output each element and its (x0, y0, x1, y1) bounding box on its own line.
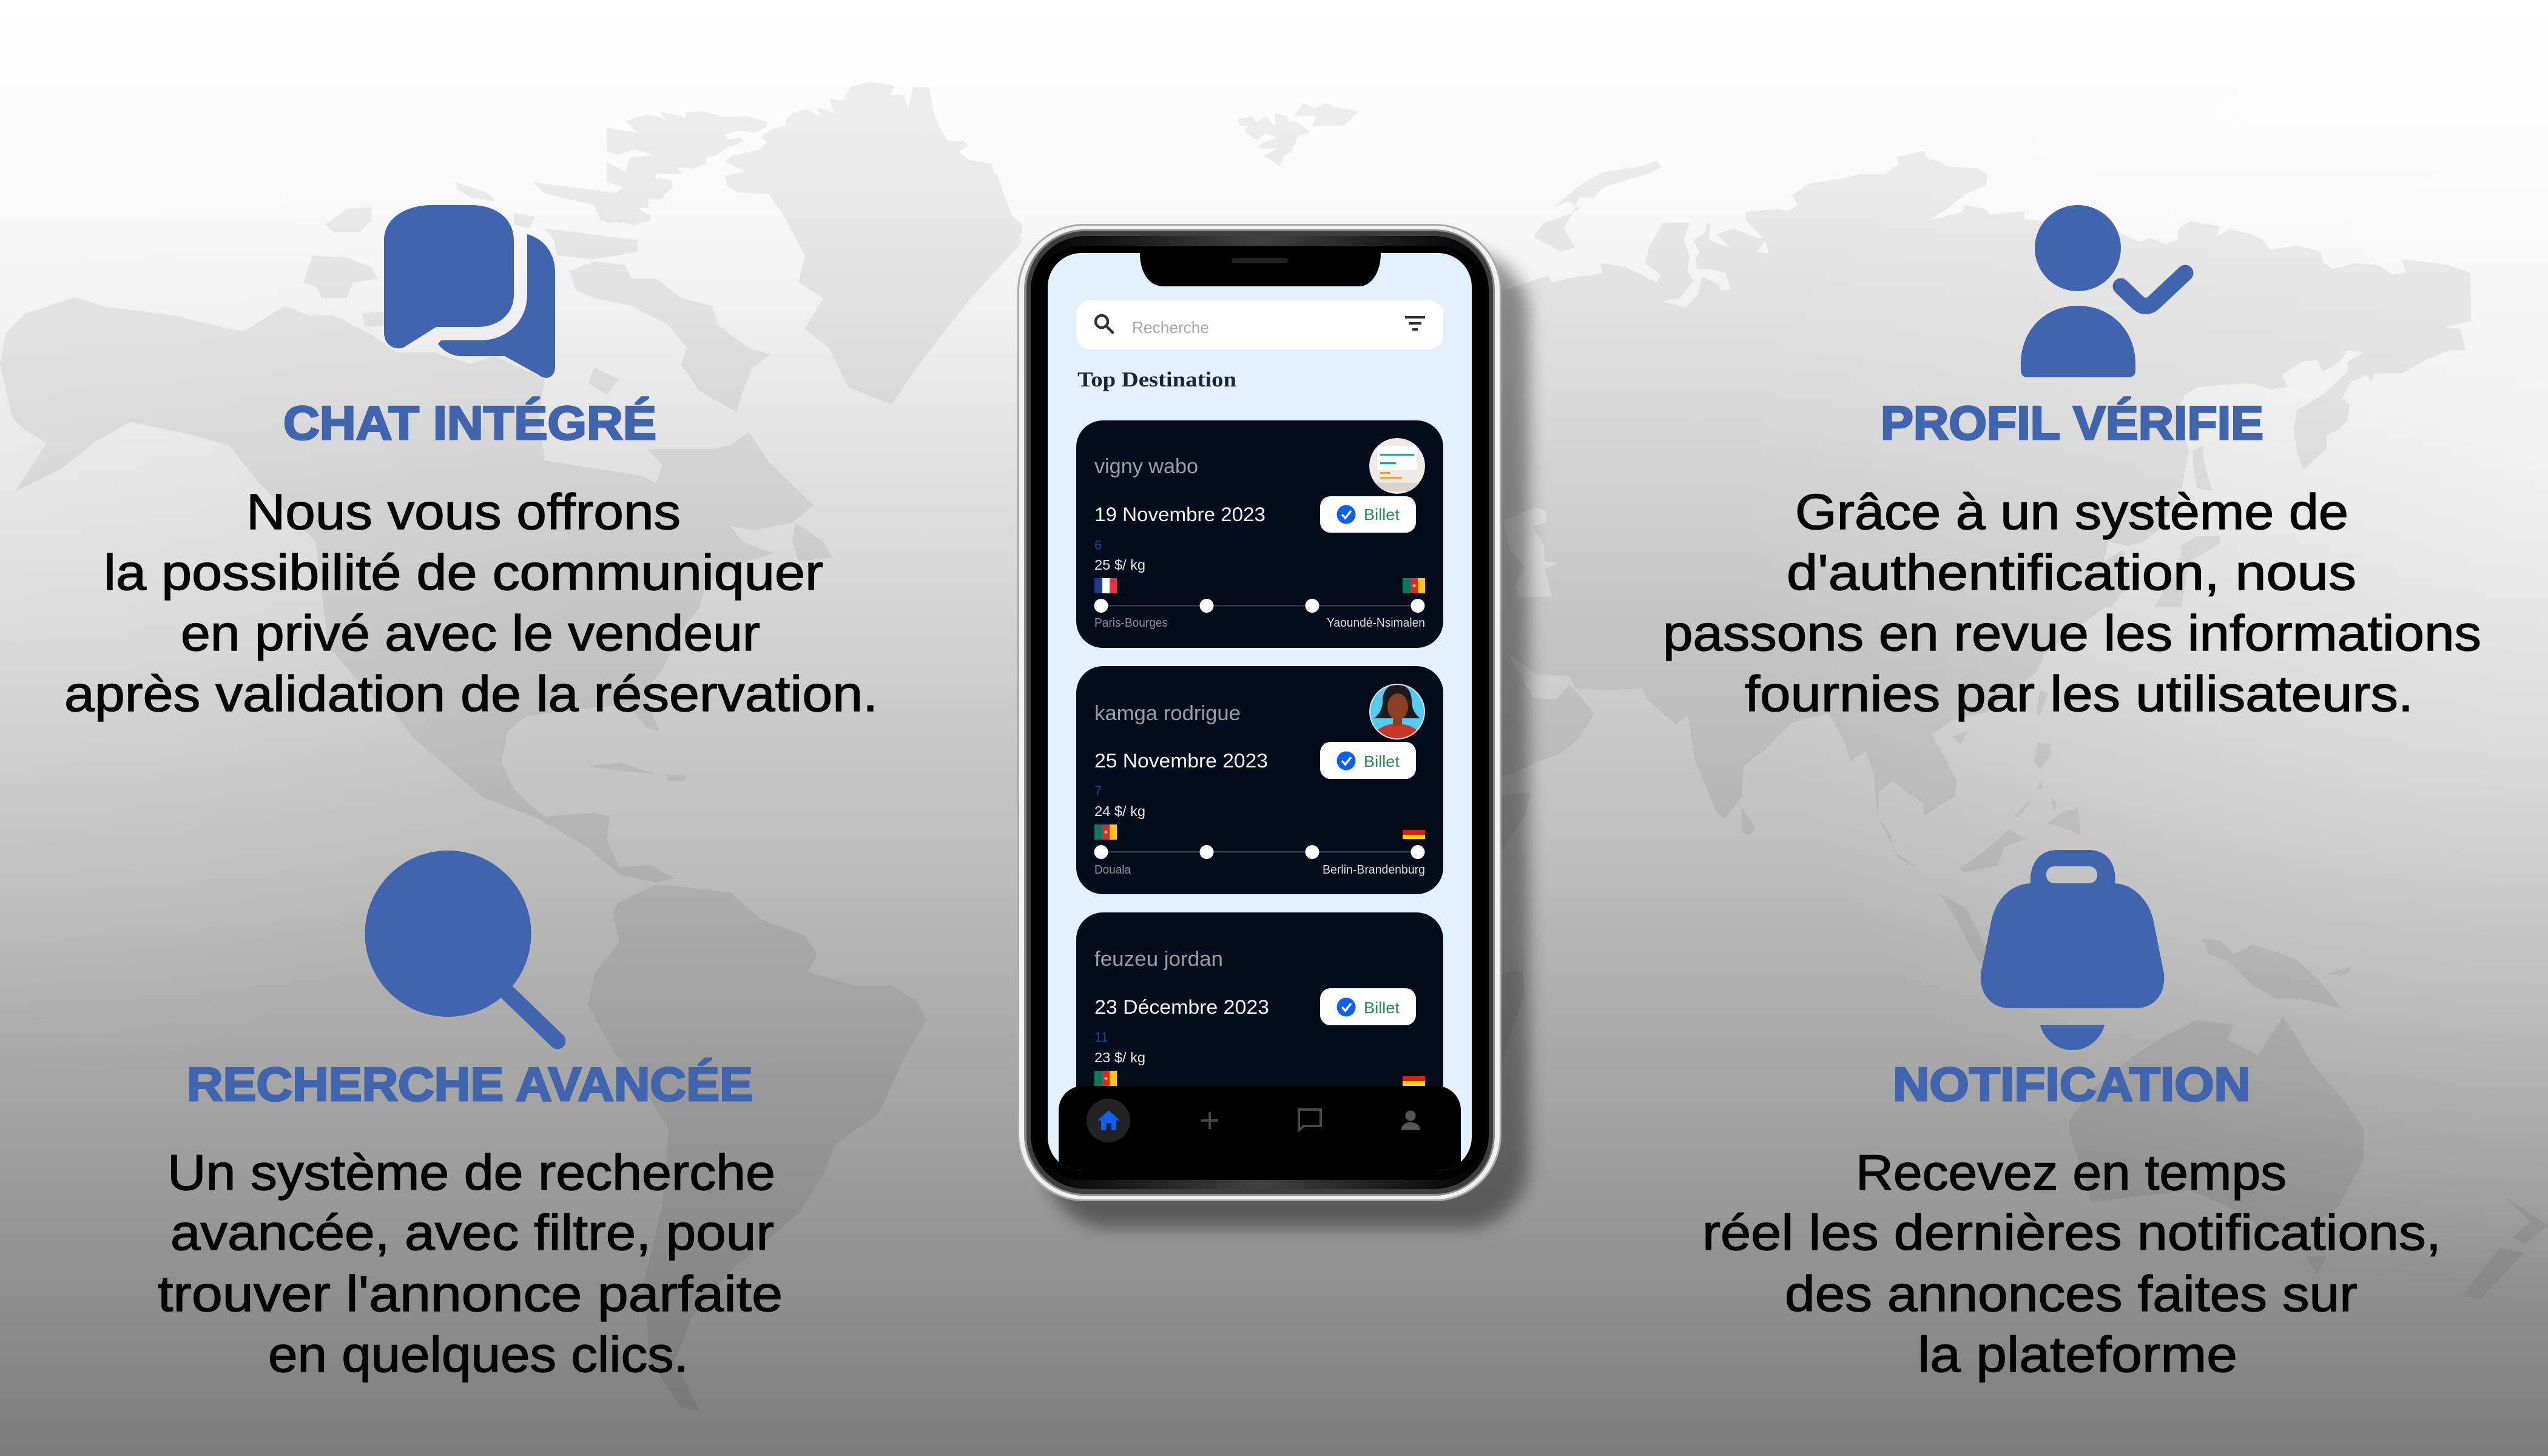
text block: notification: la plateforme (1918, 1326, 2237, 1383)
icon: filter (1405, 316, 1425, 331)
map: oceania (2069, 939, 2548, 1299)
map: greenland north and arctic islands (607, 82, 1358, 243)
icon: magnifying glass (365, 851, 558, 1041)
text block: profil vérifié: Grâce à un système de (1795, 484, 2348, 540)
card: feuzeu jordan: 11 (1094, 1030, 1108, 1045)
text block: chat intégré (64, 484, 878, 722)
map: north america and greenland (0, 174, 1022, 882)
map: eastern siberia and far east (1941, 221, 2471, 607)
card: vigny wabo: Yaoundé-Nsimalen (1327, 616, 1425, 630)
icon: add (1201, 1112, 1218, 1129)
text block: recherche avancée: en quelques clics. (268, 1326, 689, 1383)
flag: france (1094, 578, 1117, 593)
flag: germany (1403, 825, 1425, 839)
icon: profile (1401, 1110, 1420, 1130)
search placeholder: Recherche (1132, 318, 1209, 337)
text block: profil vérifié: fournies par les utilisateurs. (1745, 666, 2413, 722)
card: feuzeu jordan: 23 Décembre 2023 (1094, 996, 1269, 1018)
card: feuzeu jordan: 23 $/ kg (1094, 1050, 1145, 1065)
text block: recherche avancée: avancée, avec filtre, pour (170, 1204, 774, 1261)
icon: message (1299, 1110, 1321, 1130)
text block: notification (1702, 1144, 2441, 1383)
phone body frame (1017, 224, 1502, 1201)
phone mockup (1017, 224, 1502, 1201)
text block: profil vérifié (1663, 484, 2481, 722)
button: billet: Billet (1364, 505, 1400, 524)
card: kamga rodrigue: 25 Novembre 2023 (1094, 750, 1268, 772)
text block: notification: des annonces faites sur (1785, 1266, 2358, 1322)
flag: cameroon (1403, 578, 1425, 593)
card: vigny wabo: Paris-Bourges (1094, 616, 1168, 630)
heading: recherche avancée: RECHERCHE AVANCÉE (187, 1057, 753, 1111)
button: billet: Billet (1364, 999, 1400, 1017)
card: vigny wabo: 25 $/ kg (1094, 557, 1145, 573)
section title: top destination: Top Destination (1077, 368, 1236, 391)
card: kamga rodrigue: 24 $/ kg (1094, 803, 1145, 819)
card: feuzeu jordan: feuzeu jordan (1094, 948, 1223, 971)
icon: verified profile (2021, 205, 2185, 377)
text block: chat intégré: Nous vous offrons (246, 484, 681, 540)
text block: recherche avancée (158, 1144, 783, 1383)
map: south america (588, 885, 927, 1411)
search bar (1076, 300, 1443, 349)
card: kamga rodrigue (1076, 666, 1443, 894)
card: vigny wabo: vigny wabo (1094, 455, 1198, 478)
button: billet (1320, 988, 1416, 1025)
map: southern asia and east africa (1486, 568, 2106, 1091)
phone screen (1048, 253, 1472, 1195)
text block: recherche avancée: Un système de recherche (167, 1144, 775, 1201)
route timeline (1094, 845, 1424, 859)
card: kamga rodrigue: Berlin-Brandenburg (1323, 863, 1425, 877)
heading: profil vérifié: PROFIL VÉRIFIE (1881, 396, 2263, 450)
flag: cameroon (1094, 824, 1117, 840)
button: billet (1320, 742, 1416, 779)
button: billet (1320, 496, 1416, 533)
text block: profil vérifié: passons en revue les informations (1663, 605, 2481, 661)
text block: notification: réel les dernières notifications, (1702, 1204, 2441, 1261)
card: feuzeu jordan (1076, 912, 1443, 1119)
text block: notification: Recevez en temps (1856, 1144, 2287, 1201)
text block: recherche avancée: trouver l'annonce parfaite (158, 1266, 783, 1322)
card: kamga rodrigue: kamga rodrigue (1094, 702, 1241, 725)
button: billet: Billet (1364, 752, 1400, 770)
card: kamga rodrigue: Douala (1094, 863, 1131, 877)
route timeline (1094, 599, 1424, 613)
flag: germany (1403, 1071, 1425, 1086)
avatar: woman illustration (1369, 681, 1425, 743)
card: vigny wabo: 6 (1094, 538, 1102, 553)
text block: chat intégré: en privé avec le vendeur (181, 605, 760, 661)
text block: chat intégré: la possibilité de communiquer (104, 544, 823, 601)
icon: search (1096, 315, 1113, 332)
icon: home (1087, 1099, 1130, 1142)
text block: profil vérifié: d'authentification, nous (1787, 544, 2356, 601)
card: vigny wabo: 19 Novembre 2023 (1094, 504, 1266, 525)
heading: notification: NOTIFICATION (1893, 1057, 2251, 1111)
text block: chat intégré: après validation de la réservation. (64, 666, 878, 722)
flag: cameroon (1094, 1071, 1117, 1086)
map: northern eurasia and novaya zemlya (1486, 151, 2093, 607)
card: vigny wabo (1076, 420, 1443, 648)
bottom navigation bar (1059, 1086, 1461, 1195)
phone shadow (1045, 251, 1529, 1228)
heading: chat intégré: CHAT INTÉGRÉ (283, 396, 656, 450)
card: kamga rodrigue: 7 (1094, 783, 1102, 798)
icon: chat bubbles (384, 205, 555, 378)
icon: notification bell (1981, 850, 2164, 1050)
avatar: screenshot (1369, 438, 1425, 494)
phone notch (1140, 252, 1381, 286)
